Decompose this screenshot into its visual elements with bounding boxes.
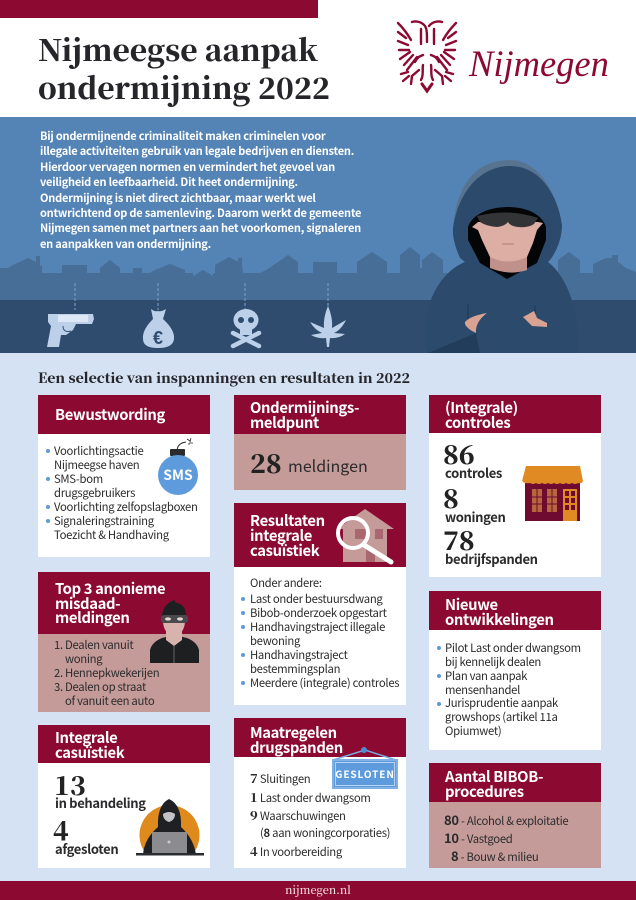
top accent bar bbox=[0, 0, 318, 18]
list: Meerdere (integrale) controles bbox=[250, 675, 399, 691]
figures: 8 bbox=[443, 479, 459, 516]
figures: bedrijfspanden bbox=[445, 549, 538, 568]
figures: 86 bbox=[443, 435, 475, 472]
count: meldingen bbox=[288, 453, 368, 477]
heading bbox=[234, 395, 406, 434]
heading: drugspanden bbox=[250, 737, 343, 758]
heading: Aantal BIBOB- bbox=[445, 766, 543, 787]
icon: money bag: € bbox=[153, 328, 163, 348]
list: Bibob-onderzoek opgestart bbox=[250, 605, 387, 621]
list: bewoning bbox=[250, 633, 300, 649]
panel: Aantal BIBOB-procedures bbox=[429, 763, 601, 868]
list bbox=[234, 567, 406, 705]
hooded figure bbox=[425, 160, 579, 353]
list: 7 Sluitingen bbox=[250, 769, 310, 787]
panel: Nieuwe ontwikkelingen bbox=[429, 591, 601, 750]
figures: in behandeling bbox=[55, 793, 146, 812]
intro text: veiligheid en leefbaarheid. Dit heet ondermijning. bbox=[40, 174, 298, 190]
list: 3. Dealen op straat bbox=[54, 679, 146, 695]
panel: Bewustwording bbox=[38, 395, 210, 557]
list: Signaleringstraining bbox=[54, 513, 154, 529]
figures: 13 bbox=[54, 766, 86, 803]
icon: masked man bbox=[150, 600, 199, 663]
list: 4 In voorbereiding bbox=[250, 842, 342, 860]
list: Pilot Last onder dwangsom bbox=[445, 640, 581, 656]
icon: shop bbox=[522, 466, 583, 521]
heading: Integrale bbox=[55, 727, 117, 748]
panel: Integrale casuïstiek bbox=[38, 725, 210, 868]
title: ondermijning 2022 bbox=[38, 66, 330, 108]
heading bbox=[429, 763, 601, 802]
heading bbox=[429, 395, 601, 433]
list: Opiumwet) bbox=[445, 723, 501, 739]
icon: gesloten sign: GESLOTEN bbox=[335, 766, 395, 781]
figures: afgesloten bbox=[55, 839, 118, 858]
list: growshops (artikel 11a bbox=[445, 709, 558, 725]
list bbox=[38, 434, 210, 557]
count: 28 bbox=[250, 444, 282, 481]
heading: Ondermijnings- bbox=[250, 397, 359, 418]
title: Nijmeegse aanpak bbox=[38, 28, 318, 70]
heading: integrale bbox=[250, 525, 312, 546]
hero panel bbox=[0, 117, 636, 353]
list: of vanuit een auto bbox=[65, 693, 154, 709]
panel: Ondermijningsmeldpunt bbox=[234, 395, 406, 490]
list bbox=[38, 634, 210, 712]
figures bbox=[38, 763, 210, 868]
list: 2. Hennepkwekerijen bbox=[54, 665, 159, 681]
panel: Top 3 anonieme misdaadmeldingen bbox=[38, 572, 210, 712]
intro text: Bij ondermijnende criminaliteit maken criminelen voor bbox=[40, 128, 325, 144]
heading: procedures bbox=[445, 781, 524, 802]
list: drugsgebruikers bbox=[54, 485, 135, 501]
ground bbox=[0, 300, 636, 353]
list: Handhavingstraject bbox=[250, 647, 348, 663]
icon: money bag bbox=[143, 309, 174, 348]
heading bbox=[234, 503, 406, 567]
list: 8 - Bouw & milieu bbox=[451, 846, 538, 865]
heading: meldingen bbox=[55, 607, 130, 628]
section heading: Een selectie van inspanningen en resultaten in 2022 bbox=[38, 367, 410, 387]
heading: meldpunt bbox=[250, 412, 319, 433]
list: Handhavingstraject illegale bbox=[250, 619, 385, 635]
list: Jurisprudentie aanpak bbox=[445, 695, 558, 711]
list: Voorlichtingsactie bbox=[54, 443, 143, 459]
figures: 4 bbox=[53, 811, 69, 848]
intro text: Hierdoor vervagen normen en vermindert het gevoel van bbox=[40, 159, 335, 175]
icon: gesloten sign bbox=[332, 747, 398, 789]
heading: Bewustwording bbox=[55, 404, 165, 425]
heading bbox=[38, 395, 210, 434]
list: 1. Dealen vanuit bbox=[54, 637, 133, 653]
list: woning bbox=[65, 651, 102, 667]
heading: (Integrale) bbox=[445, 397, 518, 418]
heading: casuïstiek bbox=[250, 540, 319, 561]
intro text: en aanpakken van ondermijning. bbox=[40, 236, 211, 252]
heading: misdaad- bbox=[55, 593, 120, 614]
intro text bbox=[40, 128, 361, 252]
list: bestemmingsplan bbox=[250, 661, 340, 677]
list: 10 - Vastgoed bbox=[444, 828, 512, 847]
heading bbox=[234, 718, 406, 757]
heading bbox=[38, 725, 210, 763]
list bbox=[429, 802, 601, 868]
list: Onder andere: bbox=[250, 575, 322, 591]
figures bbox=[429, 433, 601, 577]
icon: hacker at laptop bbox=[136, 799, 204, 856]
list: (8 aan woningcorporaties) bbox=[260, 825, 390, 841]
logo: Nijmegen eagle bbox=[396, 20, 458, 94]
icon: cannabis leaf bbox=[310, 306, 346, 347]
title bbox=[38, 28, 330, 108]
icon: pistol bbox=[47, 314, 94, 347]
footer bbox=[0, 881, 636, 900]
heading: Nieuwe bbox=[445, 594, 498, 615]
count bbox=[234, 434, 406, 490]
list: 9 Waarschuwingen bbox=[250, 806, 346, 824]
intro text: illegale activiteiten gebruik van legale bedrijven en diensten. bbox=[40, 143, 354, 159]
list: mensenhandel bbox=[445, 682, 520, 698]
list: Toezicht & Handhaving bbox=[54, 527, 169, 543]
heading: Resultaten bbox=[250, 510, 325, 531]
icon: skull bbox=[233, 309, 259, 346]
list: Last onder bestuursdwang bbox=[250, 591, 382, 607]
figures: woningen bbox=[445, 507, 505, 526]
intro text: ontwrichtend op de samenleving. Daarom werkt de gemeente bbox=[40, 205, 361, 221]
heading: Maatregelen bbox=[250, 722, 337, 743]
heading: casuïstiek bbox=[55, 742, 124, 763]
list: Nijmeegse haven bbox=[54, 457, 139, 473]
icon: house under magnifier bbox=[336, 509, 394, 564]
panel: (Integrale) controles bbox=[429, 395, 601, 577]
list: 80 - Alcohol & exploitatie bbox=[444, 810, 568, 829]
heading: Top 3 anonieme bbox=[55, 578, 165, 599]
panel: Resultaten integrale casuïstiek bbox=[234, 503, 406, 705]
logo wordmark: Nijmegen bbox=[469, 43, 609, 84]
panel: Maatregelen drugspanden bbox=[234, 718, 406, 868]
heading: controles bbox=[445, 412, 510, 433]
intro text: Nijmegen samen met partners aan het voorkomen, signaleren bbox=[40, 220, 361, 236]
list: SMS-bom bbox=[54, 471, 103, 487]
city skyline bbox=[0, 160, 636, 353]
footer: nijmegen.nl bbox=[285, 882, 351, 898]
icon: SMS bomb: SMS bbox=[163, 465, 193, 485]
header background bbox=[0, 0, 636, 117]
intro text: Ondermijning is niet direct zichtbaar, maar werkt wel bbox=[40, 190, 316, 206]
icon: SMS bomb bbox=[158, 438, 198, 495]
list: 1 Last onder dwangsom bbox=[250, 788, 371, 806]
heading bbox=[38, 572, 210, 634]
list bbox=[234, 757, 406, 868]
list: Voorlichting zelfopslagboxen bbox=[54, 499, 198, 515]
figures: 78 bbox=[443, 521, 475, 558]
list: bij kennelijk dealen bbox=[445, 654, 541, 670]
list: Plan van aanpak bbox=[445, 668, 527, 684]
heading bbox=[429, 591, 601, 630]
figures: controles bbox=[445, 463, 502, 482]
heading: ontwikkelingen bbox=[445, 609, 554, 630]
list bbox=[429, 630, 601, 750]
